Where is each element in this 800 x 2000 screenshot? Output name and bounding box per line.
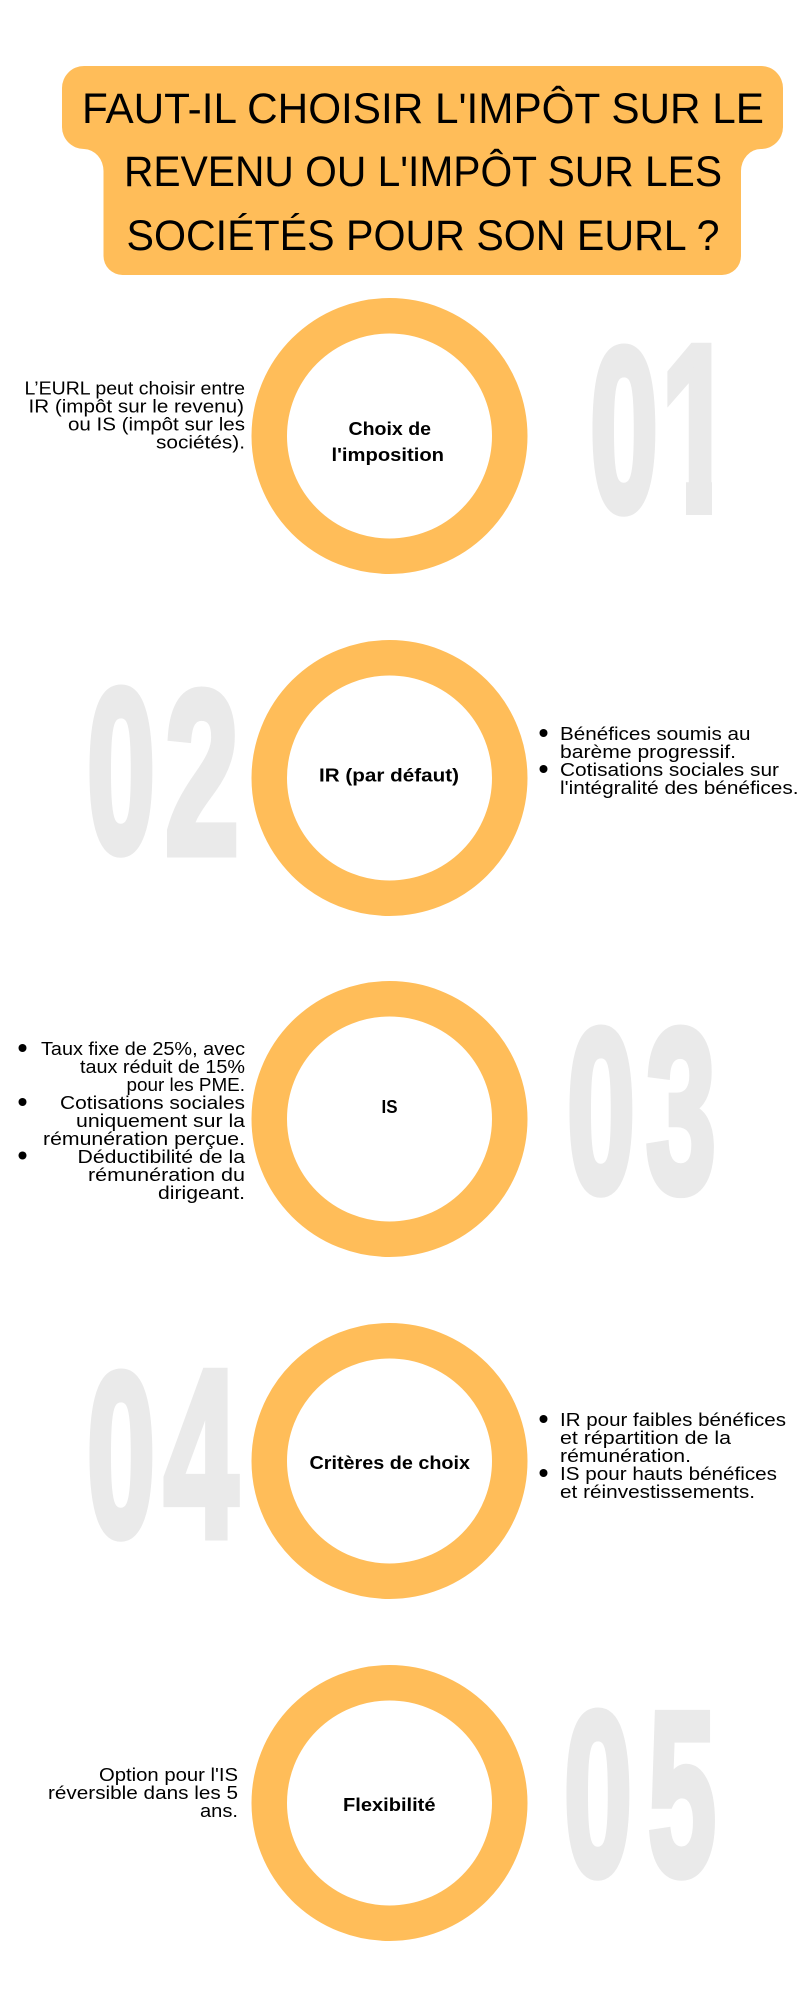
step 01 bbox=[24, 297, 733, 562]
number 02: 2 bbox=[165, 644, 239, 903]
text: description 01: IR (impôt sur le revenu) bbox=[28, 396, 244, 416]
bullet list 02: Bénéfices soumis au bbox=[560, 723, 750, 744]
text: description 05: Option pour l'IS bbox=[99, 1764, 238, 1785]
text: description 01: ou IS (impôt sur les bbox=[68, 414, 245, 434]
bullet list 03 bbox=[18, 1038, 246, 1203]
number 05: 5 bbox=[648, 1665, 716, 1924]
bullet list 03: Déductibilité de la bbox=[78, 1146, 246, 1167]
step 05 bbox=[48, 1665, 716, 1924]
bullet list 02 bbox=[540, 723, 798, 798]
text: description 05: ans. bbox=[200, 1800, 238, 1821]
ring 01 bbox=[269, 316, 510, 556]
number 01: 1 bbox=[661, 297, 733, 562]
ring 02 bbox=[269, 658, 510, 898]
title text: REVENU OU L'IMPÔT SUR LES bbox=[124, 148, 722, 196]
label: Critères de choix: Critères de choix bbox=[310, 1452, 471, 1473]
title background shape bbox=[62, 66, 783, 275]
number 02: 0 bbox=[87, 642, 155, 901]
bullet list 03: pour les PME. bbox=[126, 1074, 245, 1095]
number 03: 0 bbox=[567, 982, 635, 1241]
number 04: 4 bbox=[164, 1322, 238, 1587]
number 03: 3 bbox=[646, 982, 716, 1241]
label: Choix de l'imposition bbox=[332, 418, 444, 465]
text: description 05: réversible dans les 5 bbox=[48, 1782, 238, 1803]
title text: FAUT-IL CHOISIR L'IMPÔT SUR LE bbox=[82, 85, 764, 133]
bullet list 04: et répartition de la bbox=[560, 1427, 732, 1448]
step 03 bbox=[18, 982, 716, 1241]
bullet list 04: et réinvestissements. bbox=[560, 1481, 755, 1502]
step 04 bbox=[87, 1322, 786, 1587]
text: description 01: sociétés). bbox=[156, 432, 245, 452]
number 01 bbox=[592, 342, 712, 517]
bullet list 03: rémunération du bbox=[88, 1164, 245, 1185]
ring 04 bbox=[269, 1341, 510, 1581]
title text bbox=[82, 85, 764, 260]
number 05: 0 bbox=[564, 1665, 632, 1924]
label: IS: IS bbox=[382, 1096, 398, 1117]
title banner bbox=[62, 66, 783, 275]
text: description 01: L’EURL peut choisir entre bbox=[24, 378, 245, 398]
bullet list 03: Taux fixe de 25%, avec bbox=[41, 1038, 245, 1059]
bullet list 03: Cotisations sociales bbox=[60, 1092, 245, 1113]
label: Choix de l'imposition: Choix de bbox=[348, 418, 431, 439]
label: Choix de l'imposition: l'imposition bbox=[332, 444, 444, 465]
bullet list 02: Cotisations sociales sur bbox=[560, 759, 779, 780]
bullet list 03: dirigeant. bbox=[158, 1182, 245, 1203]
bullet list 02: barème progressif. bbox=[560, 741, 736, 762]
bullet list 04 bbox=[540, 1409, 786, 1502]
bullet list 02: l'intégralité des bénéfices. bbox=[560, 777, 798, 798]
number 01: 0 bbox=[590, 301, 658, 560]
text: description 05 bbox=[48, 1764, 238, 1821]
text: description 01 bbox=[24, 378, 245, 452]
bullet list 03: uniquement sur la bbox=[76, 1110, 246, 1131]
bullet list 04: IR pour faibles bénéfices bbox=[560, 1409, 786, 1430]
ring 05 bbox=[269, 1683, 510, 1923]
step 02 bbox=[87, 642, 798, 903]
label: IR (par défaut): IR (par défaut) bbox=[319, 764, 459, 786]
ring 03 bbox=[269, 999, 510, 1239]
title text: SOCIÉTÉS POUR SON EURL ? bbox=[126, 212, 720, 260]
bullet list 04: IS pour hauts bénéfices bbox=[560, 1463, 777, 1484]
bullet list 03: taux réduit de 15% bbox=[80, 1056, 245, 1077]
bullet list 03: rémunération perçue. bbox=[43, 1128, 245, 1149]
number 04: 0 bbox=[87, 1326, 155, 1585]
bullet list 04: rémunération. bbox=[560, 1445, 691, 1466]
label: Flexibilité: Flexibilité bbox=[343, 1794, 436, 1815]
